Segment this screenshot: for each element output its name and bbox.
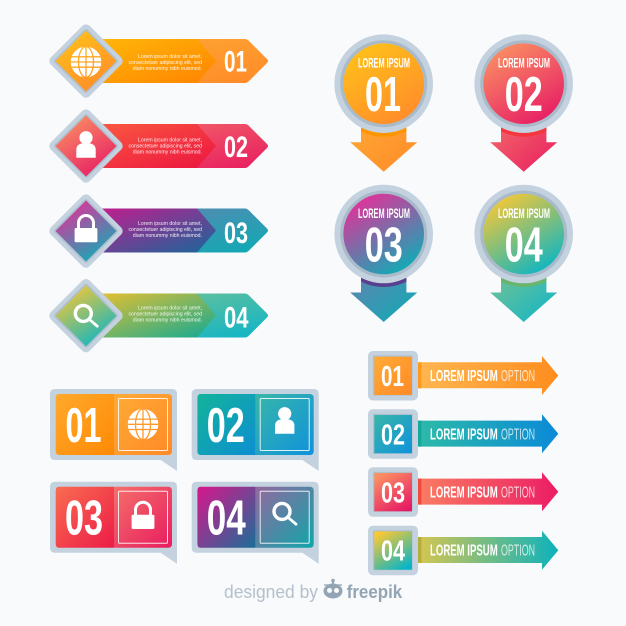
number 01: 01 [224, 46, 247, 79]
icon: globe [71, 47, 101, 77]
diamond frame 03 [47, 192, 125, 270]
circle fill 02 [483, 43, 564, 124]
banner text 02: consectetuer adipiscing elit, sed [128, 144, 202, 150]
square number 02: 02 [381, 419, 405, 451]
circle caption 02: LOREM IPSUM [498, 56, 550, 71]
number 04: 04 [224, 302, 249, 334]
option arrow 02 [418, 414, 558, 453]
banner text 01: consectetuer adipiscing elit, sed [128, 60, 202, 66]
circle caption 01: LOREM IPSUM [358, 56, 410, 71]
circle number 02: 02 [505, 68, 543, 122]
panel: diamond banner 02 [47, 107, 268, 185]
bubble number 01: 01 [66, 399, 102, 453]
circle frame 04 [474, 185, 573, 283]
bubble frame 04 [192, 482, 319, 564]
circle number 04: 04 [505, 218, 543, 272]
panel: circle pin 01 [334, 34, 434, 172]
circle fill 01 [343, 43, 424, 124]
panel: option row 04 [368, 526, 558, 575]
bubble left fill 01 [56, 394, 114, 455]
bubble number 03: 03 [65, 492, 103, 546]
icon: person [275, 407, 294, 434]
square number 03: 03 [381, 477, 405, 509]
icon: person [76, 131, 96, 158]
banner inner arrow 01 [90, 39, 216, 83]
arrow dark band 02 [418, 421, 422, 447]
diamond fill 02 [56, 116, 116, 176]
bubble left fill 04 [197, 487, 256, 548]
bubble right fill 03 [114, 487, 172, 548]
banner inner arrow 03 [90, 208, 216, 252]
arrow shadow 04 [501, 278, 546, 287]
circle frame 02 [474, 34, 573, 133]
bubble number 02: 02 [207, 399, 245, 453]
circle caption 04: LOREM IPSUM [498, 206, 550, 221]
bubble right fill 04 [256, 487, 314, 548]
arrow down 03 [350, 264, 417, 322]
diamond fill 03 [56, 200, 116, 262]
icon: lock [132, 502, 154, 529]
option arrow 03 [418, 472, 558, 511]
option label 02: OPTION [501, 426, 535, 443]
square frame 03 [368, 467, 418, 517]
banner arrow 02 [90, 124, 268, 168]
icon: lock [75, 216, 97, 242]
option label 04: LOREM IPSUM [430, 543, 498, 560]
arrow down 01 [350, 114, 417, 172]
banner inner arrow 02 [90, 124, 216, 168]
circle number 01: 01 [365, 68, 401, 122]
option label 03: LOREM IPSUM [430, 484, 498, 501]
banner arrow 04 [90, 294, 268, 338]
arrow dark band 03 [418, 479, 422, 505]
bubble left fill 03 [56, 487, 114, 548]
square frame 04 [368, 526, 418, 575]
bubble frame 02 [192, 389, 319, 471]
footer text: designed by [224, 582, 318, 602]
option label 02: LOREM IPSUM [430, 426, 498, 443]
arrow down 02 [490, 114, 557, 172]
circle frame 01 [334, 34, 433, 133]
option label 01: OPTION [501, 368, 535, 385]
square fill 04 [374, 531, 412, 570]
option arrow 04 [418, 531, 558, 570]
square fill 03 [374, 473, 412, 511]
square number 01: 01 [381, 361, 404, 393]
panel: speech bubble 03 [50, 482, 177, 564]
circle fill 04 [483, 194, 564, 274]
arrow shadow 02 [501, 128, 546, 137]
banner text 02: diam nonummy nibh euismod. [133, 150, 202, 156]
square frame 02 [368, 409, 418, 459]
circle number 03: 03 [365, 218, 403, 272]
footer: designed by freepik [224, 579, 403, 602]
panel: speech bubble 01 [50, 389, 177, 471]
bubble left fill 02 [197, 394, 256, 455]
circle frame 03 [334, 185, 433, 283]
circle fill 03 [343, 194, 424, 274]
diamond frame 01 [47, 22, 125, 100]
panel: speech bubble 04 [192, 482, 319, 564]
option label 01: LOREM IPSUM [430, 368, 498, 385]
square fill 01 [374, 357, 412, 395]
square fill 02 [374, 415, 412, 453]
bubble right fill 02 [256, 394, 314, 455]
option label 04: OPTION [501, 543, 535, 560]
icon frame 02 [260, 398, 309, 450]
icon: globe [128, 409, 158, 440]
banner text 04: consectetuer adipiscing elit, sed [128, 312, 202, 318]
banner text 04: diam nonummy nibh euismod. [133, 318, 202, 324]
panel: diamond banner 04 [47, 277, 268, 354]
icon frame 04 [260, 491, 309, 543]
banner text 01: Lorem ipsum dolor sit amet, [138, 54, 202, 60]
diamond fill 04 [56, 285, 116, 346]
icon frame 03 [118, 491, 168, 543]
arrow shadow 01 [361, 128, 406, 137]
panel: circle pin 02 [474, 34, 574, 172]
panel: circle pin 04 [474, 185, 574, 322]
number 02: 02 [224, 131, 248, 164]
square frame 01 [368, 351, 418, 400]
option arrow 01 [418, 356, 558, 395]
banner text 01: diam nonummy nibh euismod. [133, 66, 202, 72]
diamond frame 04 [47, 277, 125, 354]
circle caption 03: LOREM IPSUM [358, 206, 410, 221]
panel: diamond banner 03 [47, 192, 268, 270]
number 03: 03 [224, 217, 248, 250]
square number 04: 04 [381, 536, 405, 568]
arrow dark band 01 [418, 362, 422, 388]
bubble right fill 01 [114, 394, 172, 455]
panel: option row 02 [368, 409, 558, 459]
banner text 04: Lorem ipsum dolor sit amet, [138, 306, 202, 312]
banner text 02: Lorem ipsum dolor sit amet, [138, 138, 202, 144]
bubble frame 01 [50, 389, 177, 471]
icon: search [75, 305, 97, 326]
arrow shadow 03 [361, 278, 406, 287]
panel: circle pin 03 [334, 185, 434, 322]
panel: diamond banner 01 [47, 22, 268, 100]
freepik wordmark: freepik [347, 581, 403, 602]
option label 03: OPTION [501, 484, 535, 501]
bubble frame 03 [50, 482, 177, 564]
banner inner arrow 04 [90, 294, 216, 338]
banner text 03: diam nonummy nibh euismod. [133, 233, 202, 239]
diamond frame 02 [47, 107, 125, 185]
banner text 03: Lorem ipsum dolor sit amet, [138, 221, 202, 227]
panel: speech bubble 02 [192, 389, 319, 471]
icon frame 01 [118, 398, 168, 450]
diamond fill 01 [56, 30, 116, 92]
icon: search [274, 503, 296, 524]
banner arrow 01 [90, 39, 268, 83]
arrow down 04 [490, 264, 557, 322]
panel: option row 03 [368, 467, 558, 517]
banner text 03: consectetuer adipiscing elit, sed [128, 227, 202, 233]
banner arrow 03 [90, 208, 268, 252]
arrow dark band 04 [418, 537, 422, 563]
icon: freepik mascot [324, 579, 342, 598]
bubble number 04: 04 [207, 492, 246, 546]
panel: option row 01 [368, 351, 558, 400]
